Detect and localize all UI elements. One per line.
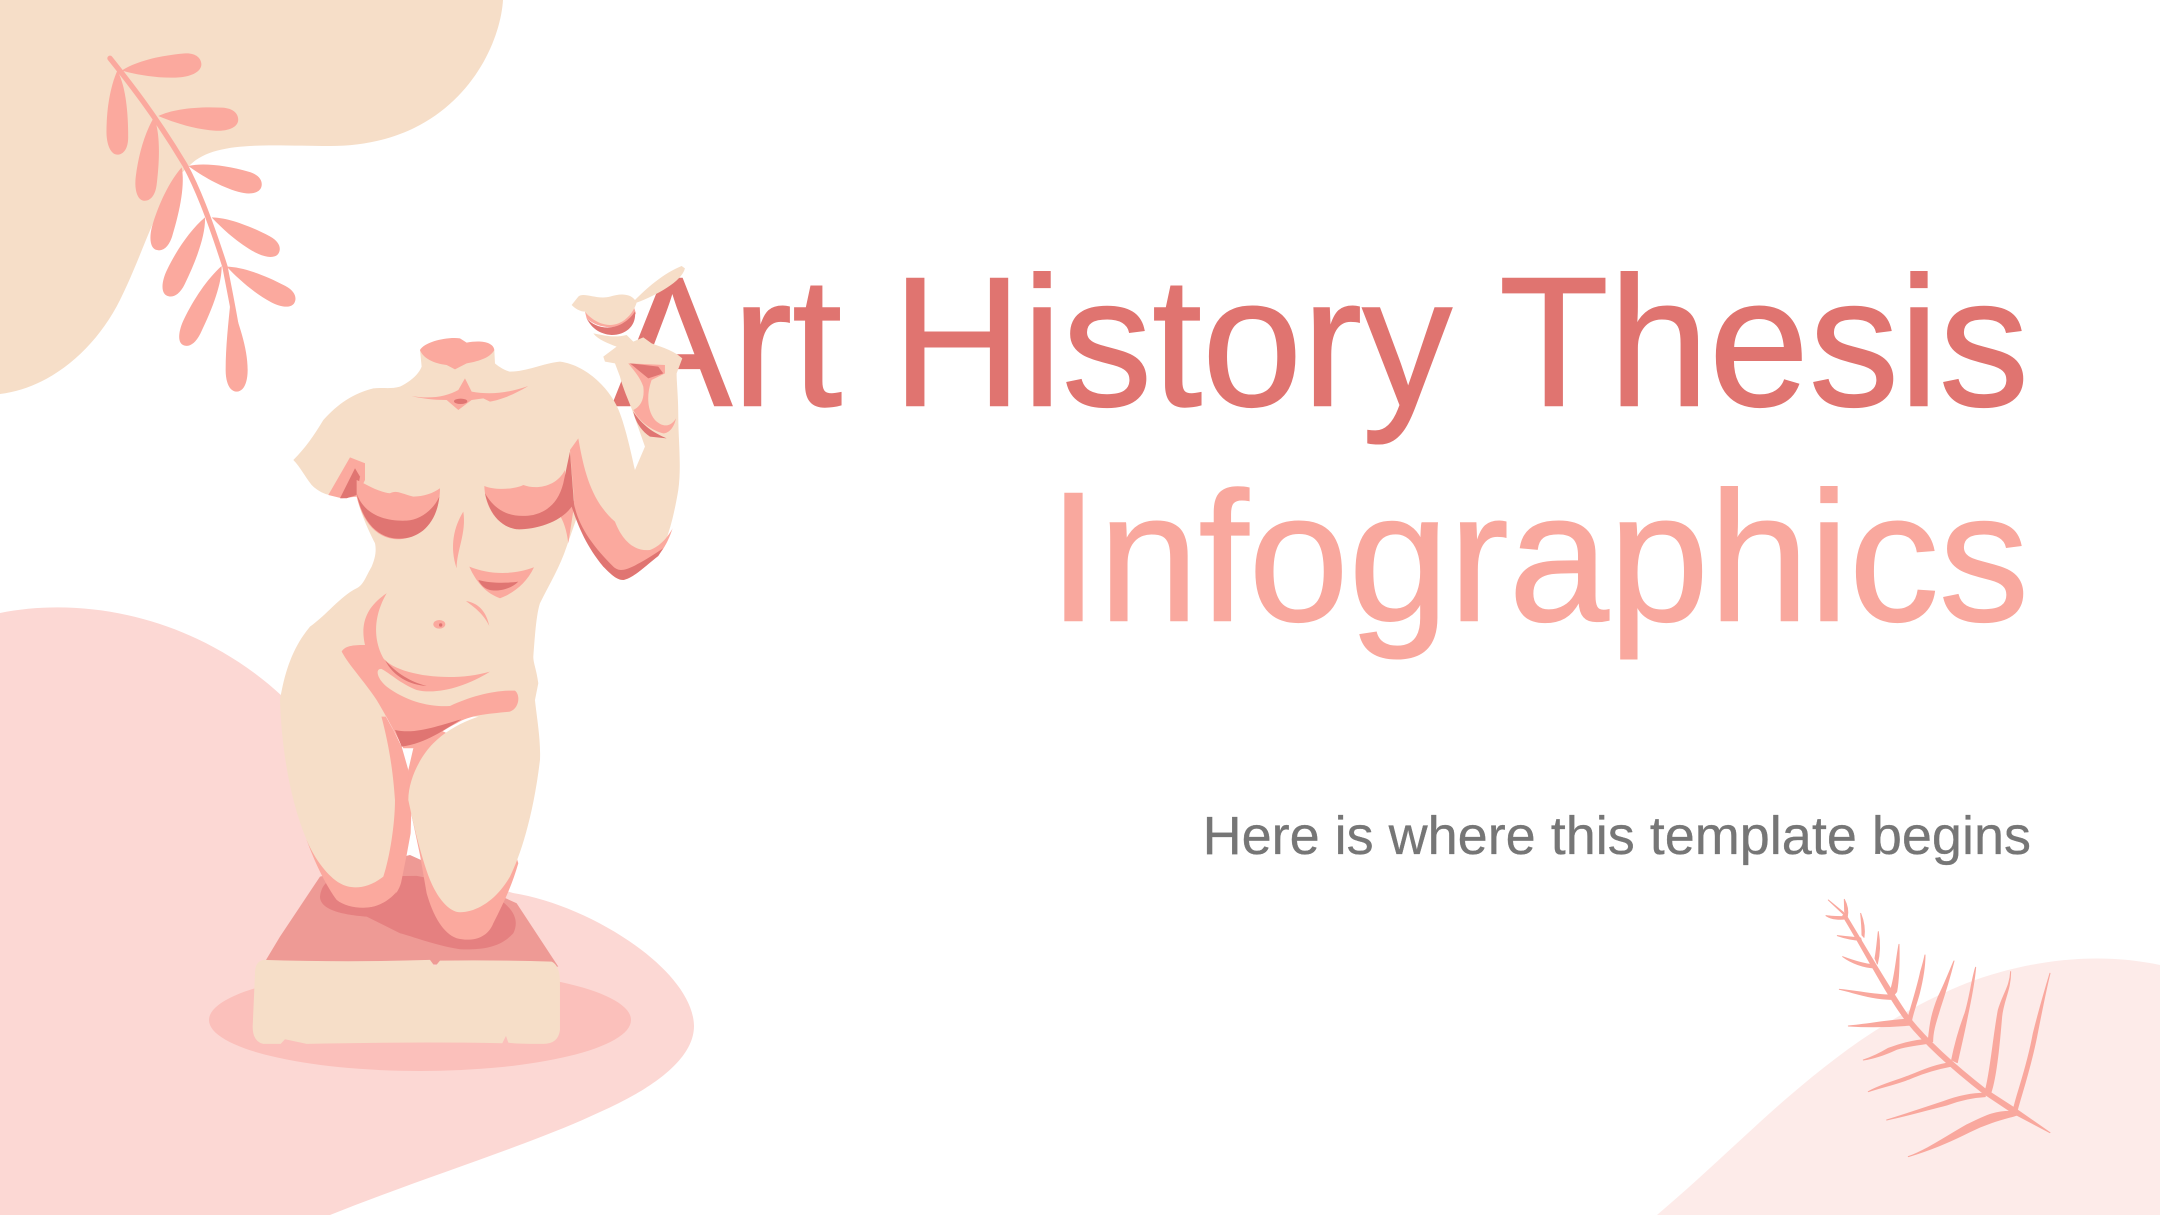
statue body xyxy=(280,333,682,717)
drape xyxy=(342,593,518,748)
rib shadow xyxy=(469,567,534,598)
title xyxy=(612,238,2029,660)
drape fold dark xyxy=(385,660,427,686)
title line 1: Art History Thesis xyxy=(612,238,2029,445)
left chest dark xyxy=(357,493,439,539)
left leg xyxy=(280,700,395,887)
arm shadow xyxy=(570,438,673,580)
collarbone hollow xyxy=(454,399,467,404)
icon: fern frond bottom right xyxy=(1826,899,2050,1157)
left armpit dark xyxy=(340,468,360,498)
title line 2: Infographics xyxy=(1048,453,2029,660)
icon: leafy branch top left xyxy=(106,52,299,392)
pedestal shadow ellipse xyxy=(209,969,631,1071)
background blob: pink bottom left xyxy=(0,607,694,1215)
abdomen streak xyxy=(453,512,464,568)
left leg shadow xyxy=(307,700,412,908)
left leg contact shade xyxy=(338,892,397,911)
hand details xyxy=(628,363,676,438)
background blob: beige top left xyxy=(0,0,503,394)
background blob: light pink bottom right xyxy=(1657,958,2160,1215)
groin dark xyxy=(395,719,462,747)
right leg shadow xyxy=(408,730,518,940)
right leg xyxy=(408,700,540,912)
right chest and arm dark xyxy=(485,452,663,580)
neck cap xyxy=(420,338,494,369)
statue xyxy=(253,266,685,1044)
belly streak xyxy=(466,601,489,626)
pedestal top xyxy=(265,855,558,967)
subtitle: Here is where this template begins xyxy=(1203,806,2031,866)
pedestal block xyxy=(253,960,560,1044)
left armpit xyxy=(328,457,365,498)
right chest shadow xyxy=(484,470,565,528)
rib shadow dark xyxy=(478,580,518,591)
bird xyxy=(572,266,685,335)
side streak xyxy=(558,500,575,543)
pedestal contact shadow xyxy=(320,876,516,949)
navel xyxy=(433,620,445,629)
left chest shadow xyxy=(357,480,440,539)
collarbone xyxy=(412,378,528,410)
